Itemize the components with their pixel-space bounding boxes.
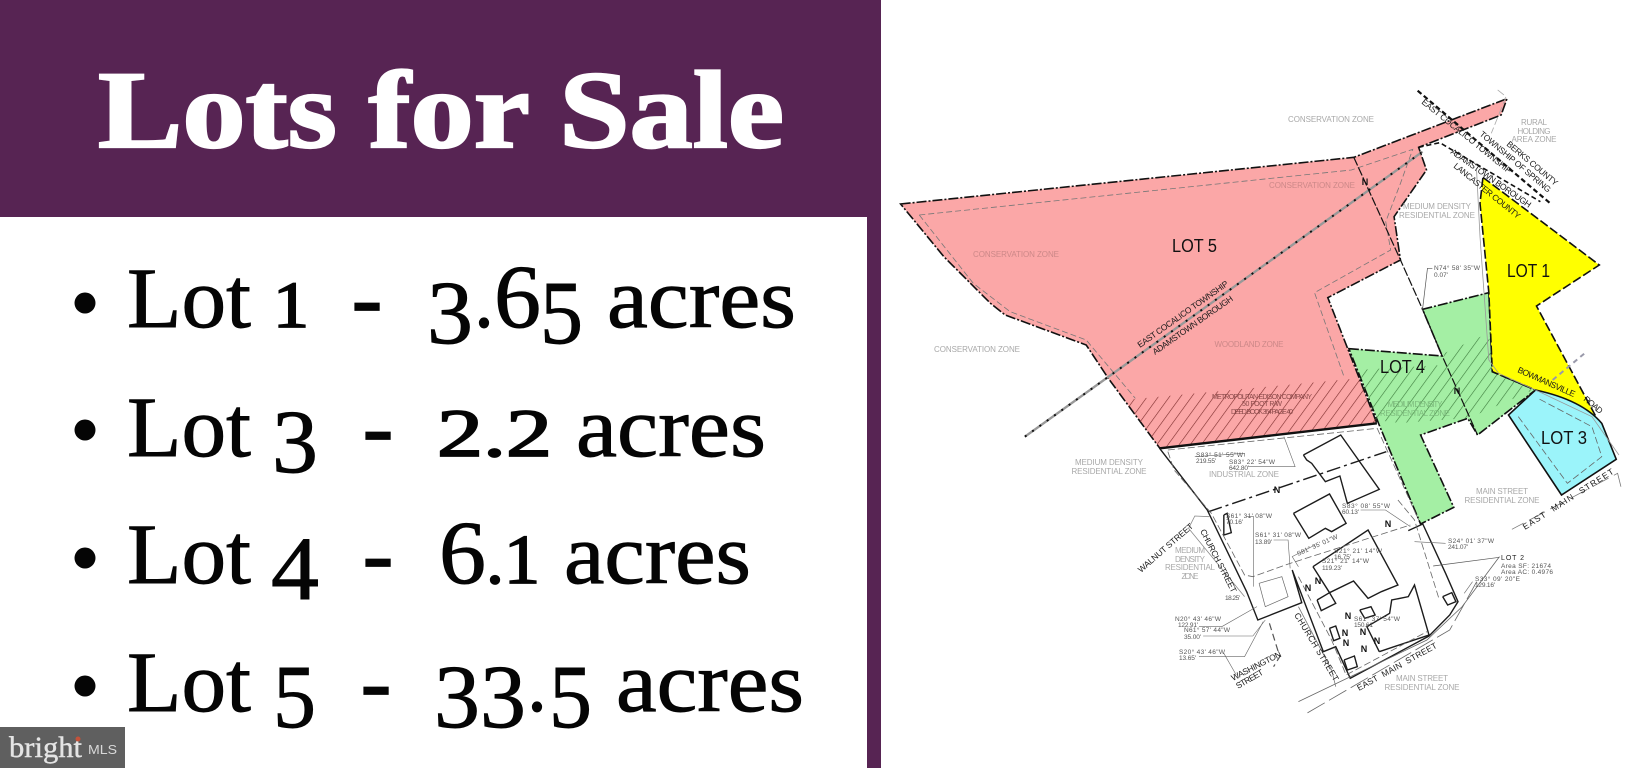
lot labels: LOT 4 [1380, 357, 1425, 377]
zoning labels [934, 115, 1556, 692]
dimension labels: 70.16' [1226, 519, 1243, 526]
dimension labels: S20° 43' 46"W [1179, 648, 1226, 656]
street and boundary labels: TOWNSHIP OF SPRING [1478, 129, 1553, 194]
zoning labels: DEED BOOK 364 PAGE 40 [1231, 409, 1293, 416]
dimension labels: 241.07' [1448, 544, 1468, 551]
dimension labels: 642.80' [1229, 465, 1249, 472]
dimension labels: 150.61' [1354, 622, 1374, 629]
street and boundary labels: LANCASTER COUNTY [1452, 161, 1523, 221]
leader lines [1195, 453, 1245, 457]
building 4 [1317, 593, 1336, 611]
dimension labels: LOT 2 [1501, 555, 1524, 562]
list item: Lot 1: 1 [273, 269, 309, 342]
street lines [1512, 473, 1621, 529]
zoning labels: RESIDENTIAL [1165, 563, 1216, 572]
dimension labels: S24° 01' 37"W [1448, 537, 1495, 545]
list item: Lot 1: acres [607, 250, 796, 346]
dashed setbacks [1168, 428, 1419, 520]
list item: Lot 5: 3 [434, 648, 480, 747]
dimension labels: S21° 21' 14"W [1334, 547, 1383, 555]
dimension labels: S21° 21' 14"W [1322, 557, 1370, 565]
line markers: N [1361, 644, 1367, 654]
dimension labels: N74° 58' 35"W [1434, 264, 1481, 272]
street and boundary labels: BOWMANSVILLE [1516, 365, 1577, 399]
list item: Lot 4 [74, 504, 751, 619]
dimension labels: Area AC: 0.4976 [1501, 569, 1553, 576]
building 5 [1367, 585, 1429, 652]
cross boundary [1208, 452, 1386, 512]
line markers: N [1345, 611, 1351, 621]
dimension labels: 122.91' [1178, 622, 1198, 629]
lot 4 parcel [1349, 293, 1535, 524]
site plan map [901, 90, 1621, 713]
zoning labels: MEDIUM DENSITY [1403, 202, 1472, 211]
list item: Lot 5: . [527, 634, 547, 730]
dimension labels: S61° 37' 54"W [1354, 615, 1401, 623]
zoning labels: HOLDING [1518, 127, 1550, 136]
list item: Lot 5: - [361, 634, 391, 730]
zoning labels: CONSERVATION ZONE [973, 250, 1059, 259]
zoning labels: MEDIUM DENSITY [1075, 458, 1144, 467]
zoning labels: METROPOLITAN EDISON COMPANY [1212, 394, 1312, 401]
street and boundary labels: ROAD [1582, 394, 1605, 416]
zoning labels: MEDIUM [1175, 546, 1205, 555]
line markers: N [1305, 583, 1311, 593]
list item: Lot 5: 5 [549, 648, 592, 747]
list item: Lot 4: 6 [439, 504, 486, 603]
dimension labels: 16.75' [1334, 554, 1351, 561]
street and boundary labels: EAST MAIN STREET [1355, 640, 1439, 693]
panel: purple frame [0, 0, 881, 768]
list item: Lot 4: 4 [271, 520, 319, 619]
list item: Lot 1 [74, 248, 796, 363]
line markers: N [1274, 485, 1280, 495]
boundary lines upper [919, 90, 1619, 483]
list item: Lot 4: acres [564, 506, 751, 602]
zoning labels: CONSERVATION ZONE [1288, 115, 1374, 124]
zoning labels: AREA ZONE [1512, 135, 1556, 144]
dimension labels: 219.55' [1196, 458, 1216, 465]
zoning labels: RESIDENTIAL ZONE [1072, 467, 1146, 476]
dimension labels: S61° 31' 08"W [1255, 531, 1302, 539]
line markers: N [1362, 177, 1368, 187]
dimension labels: 0.07' [1434, 272, 1448, 279]
hatched easement lot 4 [1356, 333, 1533, 423]
line markers: N [1385, 519, 1391, 529]
lot 5 parcel [901, 99, 1507, 448]
zoning labels: RESIDENTIAL ZONE [1384, 683, 1460, 692]
building 3 [1313, 530, 1398, 598]
lot labels: LOT 3 [1541, 428, 1587, 448]
parcel outline [1160, 448, 1458, 678]
list item: Lot 5: 5 [273, 648, 316, 747]
list item: Lot 5 [74, 634, 804, 747]
dimension labels: 129.16' [1475, 582, 1495, 589]
list item: Lot 4: - [363, 506, 393, 602]
dimension labels: 13.65' [1179, 655, 1196, 662]
list item: Lot 4: Lot [127, 506, 251, 602]
line markers: N [1315, 576, 1321, 586]
dimension labels: 119.23' [1322, 565, 1342, 572]
line markers: N [1360, 627, 1366, 637]
dimension labels: S81° 35' 01"W [1296, 532, 1340, 558]
zoning labels: RESIDENTIAL ZONE [1464, 496, 1540, 505]
lot 3 parcel [1508, 390, 1616, 495]
dimension labels: N20° 43' 46"W [1175, 615, 1222, 623]
zoning labels: DENSITY [1175, 555, 1206, 564]
dimension labels: S83° 51' 55"W [1196, 451, 1244, 459]
zoning labels: CONSERVATION ZONE [1269, 181, 1355, 190]
dimension labels: 60.13' [1342, 509, 1359, 516]
logo: bright MLS watermark [0, 727, 125, 768]
list item: Lot 4: .1 [486, 522, 540, 599]
list item: Lot 3: 2.2 [437, 395, 552, 471]
lot 1 parcel [1480, 177, 1599, 418]
lot labels: LOT 5 [1172, 236, 1217, 256]
dimension labels: 35.00' [1184, 634, 1201, 641]
list item: Lot 3: Lot [127, 379, 251, 475]
list item: Lot 3: acres [576, 379, 766, 475]
dimension labels: S33° 09' 20"E [1475, 575, 1521, 583]
street and boundary labels: WALNUT STREET [1136, 521, 1195, 575]
logo: bright MLS watermark: bright [9, 731, 83, 764]
zoning labels: MEDIUM DENSITY [1388, 400, 1443, 409]
list item: Lot 3: 3 [272, 393, 318, 492]
street and boundary labels: ADAMSTOWN BOROUGH [1150, 293, 1235, 357]
dimension labels: S83° 22' 54"W [1229, 458, 1276, 466]
list item: Lot 5: Lot [127, 634, 251, 730]
dimension labels: S61° 31' 08"W [1226, 512, 1273, 520]
hatched easement lot 5 [1124, 378, 1377, 448]
line markers: N [1454, 386, 1460, 396]
dimension labels: S83° 08' 55"W [1342, 502, 1391, 510]
dimension labels [1175, 264, 1553, 662]
line markers: N [1343, 638, 1349, 648]
logo: bright MLS watermark: MLS [88, 742, 117, 757]
zoning labels: MAIN STREET [1396, 674, 1448, 683]
street and boundary labels: CHURCH STREET [1198, 527, 1239, 594]
lot polygons and boundaries [901, 99, 1616, 524]
list item: Lot 1: 6 [494, 248, 541, 347]
list of lots [74, 248, 804, 747]
zoning labels: WOODLAND ZONE [1214, 340, 1284, 349]
list item: Lot 3: - [363, 379, 393, 475]
list item: Lot 1: Lot [127, 250, 251, 346]
zoning labels: RESIDENTIAL ZONE [1399, 211, 1475, 220]
dimension labels: Area SF: 21674 [1501, 563, 1551, 570]
line markers [1274, 177, 1460, 654]
zoning labels: INDUSTRIAL ZONE [1209, 470, 1279, 479]
street and boundary labels [1135, 97, 1615, 693]
street and boundary labels: CHURCH STREET [1292, 611, 1341, 683]
list item: Lot 1: . [474, 250, 494, 346]
street and boundary labels: EAST MAIN STREET [1521, 466, 1615, 532]
zoning labels: 50 FOOT R/W [1242, 401, 1282, 408]
building 1 [1303, 435, 1379, 503]
street and boundary labels: WASHINGTON [1229, 649, 1283, 683]
lot labels [1172, 236, 1587, 448]
list item: Lot 1: 3 [427, 264, 473, 363]
list item: Lot 3 [74, 379, 766, 492]
street and boundary labels: ADAMSTOWN BOROUGH [1449, 146, 1533, 210]
street and boundary labels: BERKS COUNTY [1505, 139, 1560, 188]
list item: Lot 5: acres [616, 634, 804, 730]
zoning labels: MAIN STREET [1476, 487, 1528, 496]
line markers: N [1342, 628, 1348, 638]
zoning labels: RESIDENTIAL ZONE [1380, 409, 1450, 418]
building 2 [1293, 494, 1346, 538]
list item: Lot 1: 5 [540, 264, 583, 363]
street and boundary labels: STREET [1234, 667, 1265, 691]
dimension labels: N61° 57' 44"W [1184, 626, 1231, 634]
zoning labels: RURAL [1521, 118, 1548, 127]
zoning labels: CONSERVATION ZONE [934, 345, 1020, 354]
dimension labels: 18.25' [1225, 595, 1240, 602]
site plan linework lower [1160, 428, 1621, 713]
zoning labels: ZONE [1182, 572, 1198, 581]
dimension labels: 13.89' [1255, 539, 1272, 546]
lot labels: LOT 1 [1507, 261, 1550, 281]
line markers: N [1374, 636, 1380, 646]
list item: Lot 5: 3 [480, 648, 526, 747]
list item: Lot 1: - [352, 250, 382, 346]
street and boundary labels: EAST COCALICO TOWNSHIP [1420, 97, 1514, 176]
title: Lots for Sale [98, 49, 784, 171]
street and boundary labels: EAST COCALICO TOWNSHIP [1135, 278, 1230, 350]
